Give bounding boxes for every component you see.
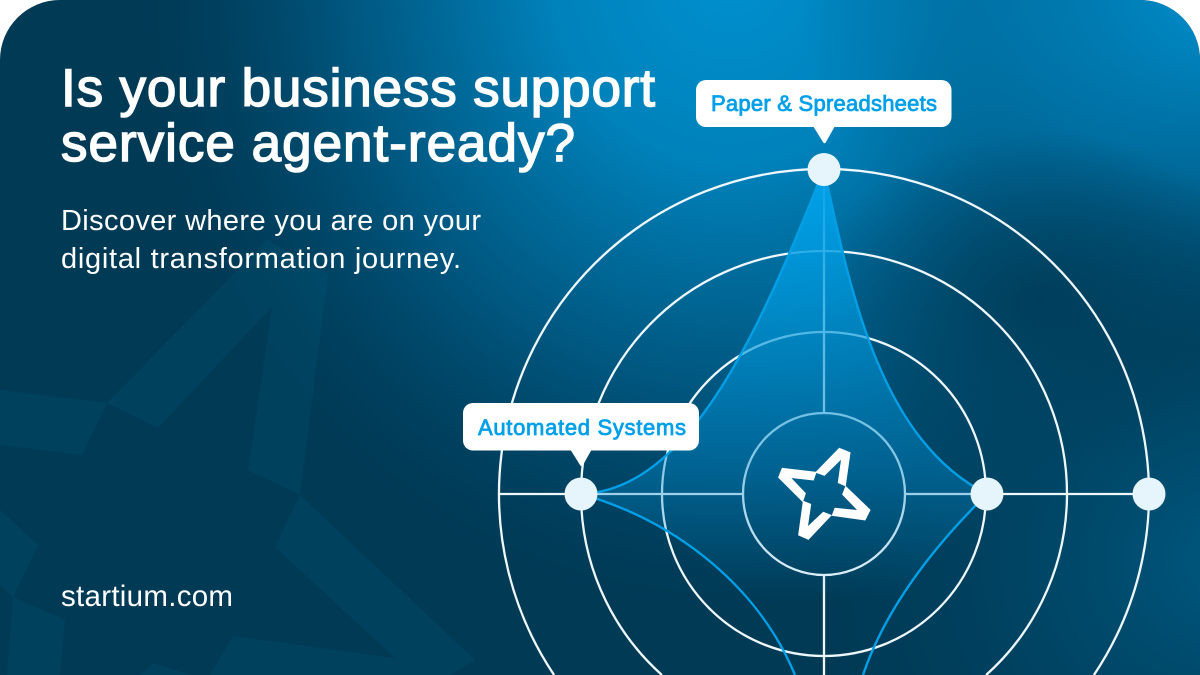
title: Is your business support	[61, 59, 655, 118]
title	[61, 59, 655, 173]
watermark star	[0, 240, 475, 675]
radar nodes	[564, 153, 1166, 510]
subtitle: digital transformation journey.	[61, 243, 461, 275]
subtitle: Discover where you are on your	[61, 205, 481, 237]
icon: star logo	[779, 448, 870, 539]
callout: Automated Systems: Automated Systems	[478, 415, 686, 440]
radar data area	[581, 169, 987, 675]
radar data outline	[581, 169, 987, 675]
website link: startium.com	[61, 580, 233, 613]
callout: Paper & Spreadsheets: Paper & Spreadsheets	[711, 91, 937, 116]
title: service agent-ready?	[61, 114, 575, 173]
callout: Paper & Spreadsheets	[696, 80, 952, 143]
callout: Automated Systems	[463, 403, 699, 466]
subtitle	[61, 205, 481, 275]
radar grid	[499, 169, 1149, 675]
